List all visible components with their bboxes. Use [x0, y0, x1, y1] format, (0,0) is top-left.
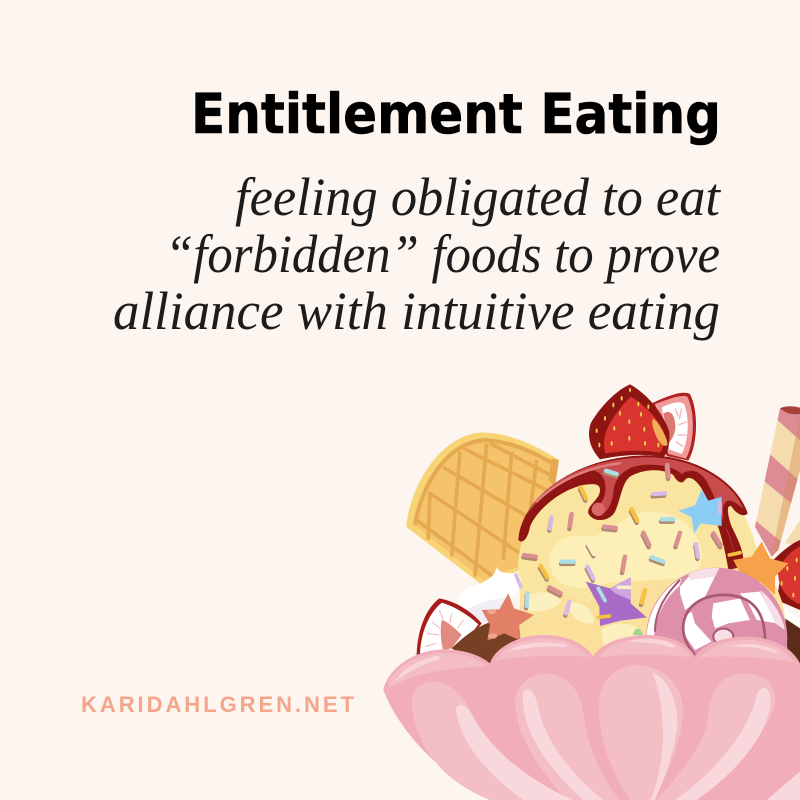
website credit: KARIDAHLGREN.NET [81, 692, 355, 717]
subtitle definition: alliance with intuitive eating [113, 281, 720, 341]
small green candy [633, 629, 643, 635]
icon: coral star [482, 593, 534, 641]
icon: blue star [678, 489, 722, 534]
subtitle definition: “forbidden” foods to prove [165, 224, 720, 284]
icon: sundae bowl [383, 635, 800, 800]
icon: whipped cream [459, 567, 521, 623]
icon: waffle [406, 432, 559, 586]
icon: strawberry slice back [652, 393, 696, 461]
icon: swirl candy [646, 568, 787, 709]
subtitle definition: feeling obligated to eat [235, 167, 722, 227]
icon: wafer sticks [755, 406, 800, 556]
sprinkle on orange star [729, 553, 740, 555]
chocolate scoop [452, 622, 520, 670]
infographic canvas [82, 90, 800, 800]
icon: purple star [586, 577, 647, 626]
subtitle definition [113, 167, 722, 341]
icon: front strawberry [589, 384, 669, 459]
sauce [518, 455, 748, 570]
sprinkle on blue star [714, 503, 725, 513]
chocolate and cream at right [784, 608, 800, 667]
icon: orange star [733, 542, 788, 595]
sprinkles [523, 465, 721, 616]
icon: ice cream scoop [518, 455, 785, 660]
icon: right strawberry [773, 540, 800, 610]
title: Entitlement Eating [191, 82, 721, 146]
illustration: ice cream sundae [383, 384, 800, 800]
icon: left strawberry slice [417, 598, 482, 657]
